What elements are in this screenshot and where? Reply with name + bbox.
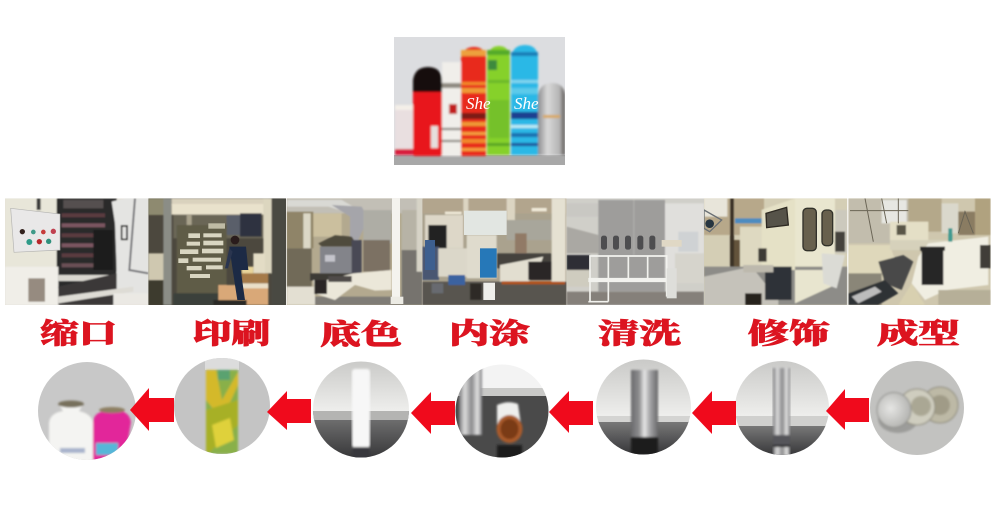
arrow: 清洗 to 内涂 bbox=[549, 391, 593, 433]
speckled stacks bbox=[178, 223, 225, 278]
washer windows bbox=[601, 236, 655, 250]
text on cans: She bbox=[514, 94, 539, 113]
arrow: 修饰 to 清洗 bbox=[692, 391, 736, 434]
circle: printed can (印刷) bbox=[172, 356, 272, 456]
label: 清洗: 清洗 bbox=[598, 318, 682, 349]
photo: printing machine control panel bbox=[5, 198, 148, 305]
photo strip: factory machines bbox=[5, 198, 991, 305]
text on cans: She bbox=[466, 94, 491, 113]
circle: inner coated cans (内涂) bbox=[455, 364, 550, 460]
white rack bbox=[588, 256, 668, 302]
circle: base coat can (底色) bbox=[312, 360, 410, 461]
photo: coating machine bbox=[287, 198, 423, 305]
white column bbox=[391, 198, 403, 304]
circle: necked cans (缩口) bbox=[38, 362, 138, 465]
label: 内涂: 内涂 bbox=[449, 318, 532, 349]
photo: can washer with control box bbox=[422, 198, 567, 305]
label: 缩口: 缩口 bbox=[40, 318, 117, 350]
label: 成型: 成型 bbox=[877, 318, 960, 349]
arrow: 底色 to 印刷 bbox=[267, 391, 311, 430]
circle: cleaned can (清洗) bbox=[595, 359, 693, 456]
label: 印刷: 印刷 bbox=[193, 318, 270, 350]
photo: washing machine with white rack bbox=[567, 198, 704, 305]
operator bbox=[225, 236, 248, 300]
label: 底色: 底色 bbox=[320, 318, 402, 350]
label: 修饰: 修饰 bbox=[748, 318, 830, 349]
control panel with buttons bbox=[11, 208, 60, 252]
circle: trimmed can (修饰) bbox=[734, 360, 830, 457]
arrow: 内涂 to 底色 bbox=[411, 392, 455, 434]
photo: forming machine by window bbox=[848, 198, 991, 305]
arrow: 印刷 to 缩口 bbox=[130, 388, 174, 431]
photo: row of aerosol cans bbox=[394, 37, 565, 165]
text on cans bbox=[466, 97, 538, 109]
photo: print line with operator bbox=[148, 198, 286, 305]
arrow: 成型 to 修饰 bbox=[826, 389, 869, 430]
photo: trimming machine cabin bbox=[704, 198, 847, 305]
circle: aluminum slugs (成型) bbox=[868, 360, 966, 457]
